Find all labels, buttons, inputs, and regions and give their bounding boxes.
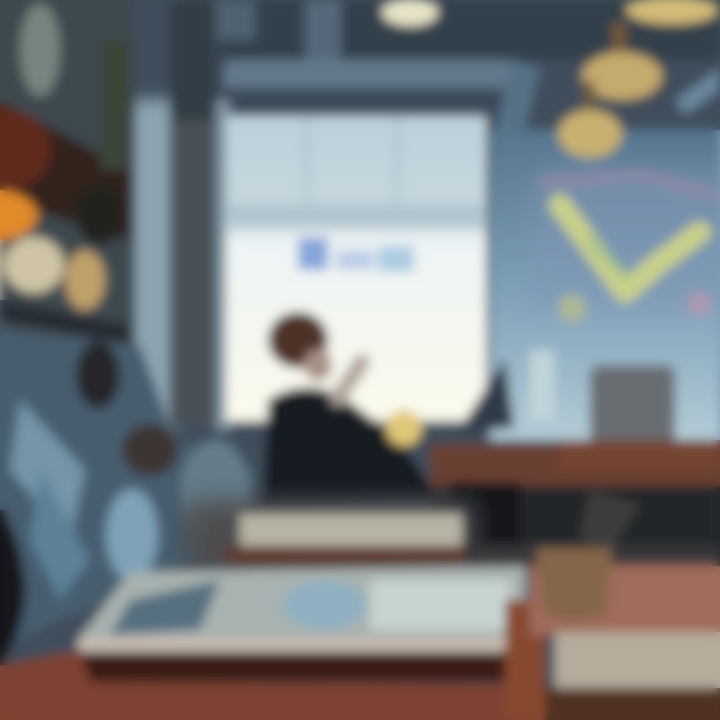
pendant lamps: [382, 0, 718, 158]
blue armchairs: [0, 330, 255, 665]
window: [226, 116, 486, 421]
column: [170, 0, 216, 425]
person at desk: [262, 312, 440, 505]
right desk with monitors: [430, 350, 720, 552]
wall chart: zigzag line: [545, 174, 715, 322]
cup: [536, 490, 640, 620]
dark mid band: [465, 545, 720, 573]
window sign: blue logo: [298, 238, 414, 272]
ceiling beams: [215, 0, 720, 150]
back table: [185, 500, 475, 570]
front table: [78, 566, 525, 682]
foreground wood surface: [0, 600, 545, 720]
right wall: [490, 130, 720, 440]
left shelves: [0, 0, 135, 345]
right foreground table: [530, 565, 720, 720]
